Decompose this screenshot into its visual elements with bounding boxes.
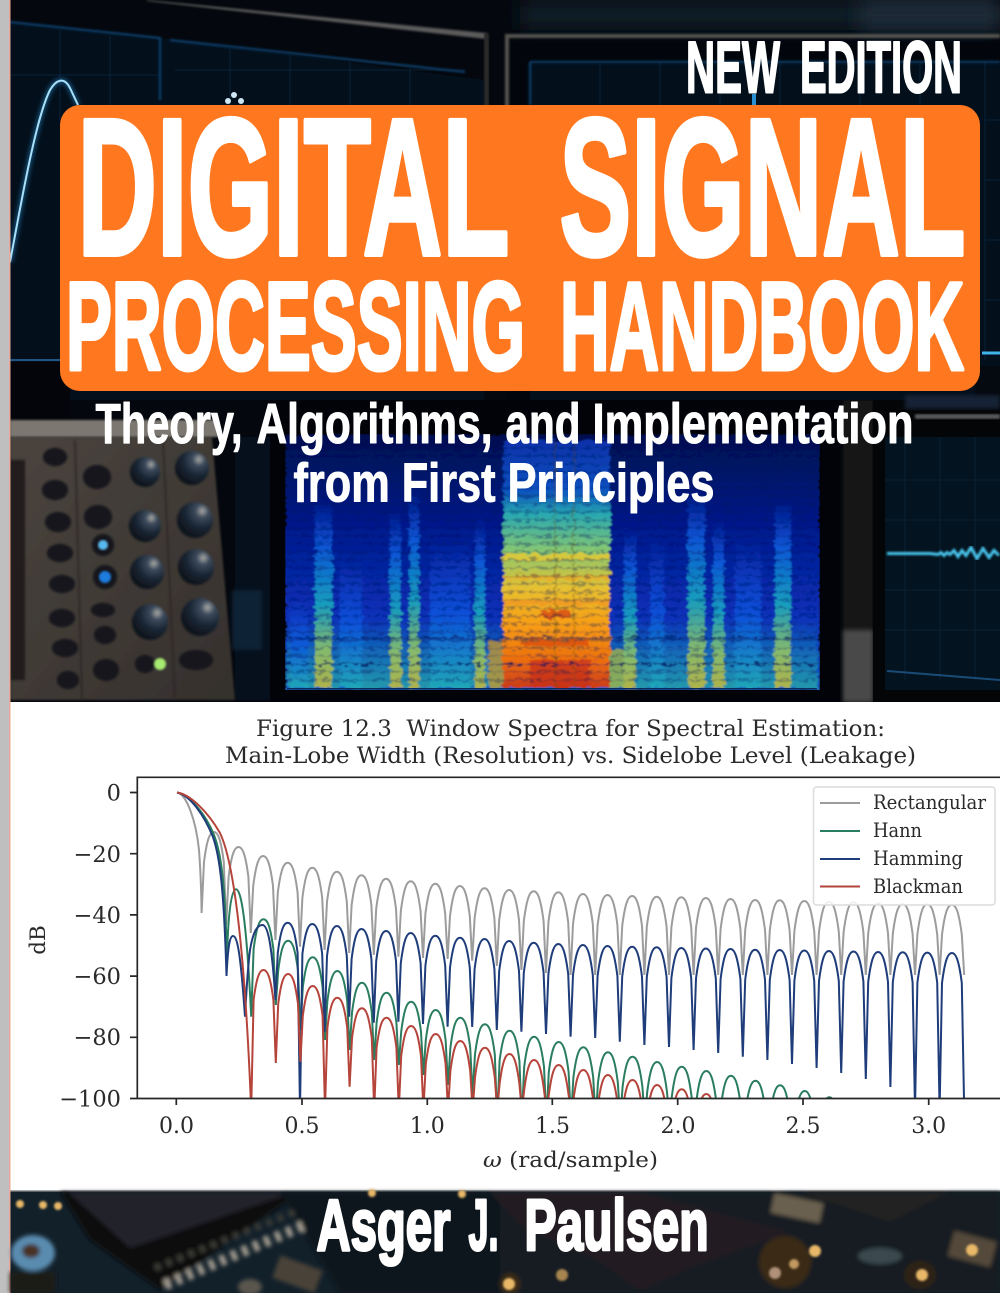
x axis tick labels: 1.0 bbox=[410, 1114, 445, 1139]
author name: Paulsen bbox=[524, 1186, 708, 1266]
subtitle: and bbox=[506, 392, 580, 456]
series: blackman window bbox=[177, 792, 719, 1124]
chart title bbox=[225, 717, 916, 769]
y axis tick labels bbox=[59, 780, 121, 1112]
chart title: Main-Lobe Width (Resolution) vs. Sidelobe Level (Leakage) bbox=[225, 744, 916, 769]
title line two: PROCESSING bbox=[66, 258, 525, 396]
y axis tick labels: −60 bbox=[74, 964, 121, 990]
y axis tick labels: −20 bbox=[74, 842, 121, 868]
x axis tick labels: 3.0 bbox=[911, 1114, 946, 1139]
author name: Asger bbox=[316, 1186, 450, 1266]
x axis tick labels: 2.5 bbox=[786, 1114, 820, 1139]
x axis tick labels bbox=[159, 1114, 946, 1139]
axes frame and ticks bbox=[130, 777, 1000, 1105]
x axis tick labels: 1.5 bbox=[535, 1114, 570, 1139]
badge: new edition: NEW bbox=[686, 28, 780, 108]
series: hann window bbox=[177, 792, 842, 1127]
icon: sine trace on left monitor bbox=[10, 81, 244, 360]
x axis tick labels: 2.0 bbox=[660, 1114, 696, 1139]
legend: Hann bbox=[873, 819, 922, 842]
left page strip bbox=[0, 0, 10, 1293]
panel: right monitor with trace bbox=[843, 353, 1000, 702]
legend bbox=[814, 787, 995, 905]
y axis tick labels: −80 bbox=[74, 1025, 121, 1051]
y axis tick labels: −40 bbox=[74, 903, 121, 929]
panel: orange title block bbox=[60, 105, 980, 391]
x axis tick labels: 0.5 bbox=[284, 1114, 320, 1139]
series: rectangular window bbox=[177, 792, 964, 975]
chart title: Figure 12.3 Window Spectra for Spectral Estimation: bbox=[256, 717, 885, 742]
x axis tick labels: 0.0 bbox=[159, 1114, 194, 1139]
legend: Hamming bbox=[873, 847, 963, 870]
photo backdrop: lab monitors bbox=[0, 0, 1000, 703]
photo backdrop: circuit board bbox=[10, 1189, 1000, 1293]
panel: white chart area bbox=[10, 702, 1000, 1190]
author name: J. bbox=[468, 1186, 498, 1266]
chart photo: spectrogram screen bbox=[270, 400, 840, 702]
subtitle: Algorithms, bbox=[256, 392, 492, 456]
badge: new edition bbox=[686, 28, 962, 108]
author name bbox=[316, 1186, 708, 1266]
y axis label: dB bbox=[26, 925, 51, 955]
legend: Rectangular bbox=[873, 791, 987, 814]
subtitle bbox=[96, 392, 914, 514]
legend: Blackman bbox=[873, 875, 963, 898]
y axis tick labels: −100 bbox=[59, 1086, 121, 1112]
x axis label: ω (rad/sample) bbox=[483, 1148, 658, 1173]
y axis tick labels: 0 bbox=[107, 780, 121, 806]
series: hamming window bbox=[177, 792, 964, 1110]
panel: oscilloscope with knobs bbox=[10, 420, 275, 700]
title line one: DIGITAL bbox=[78, 78, 509, 296]
line chart: window spectra bbox=[26, 777, 1000, 1173]
subtitle: Theory, bbox=[96, 392, 242, 456]
subtitle: from First Principles bbox=[294, 452, 714, 514]
